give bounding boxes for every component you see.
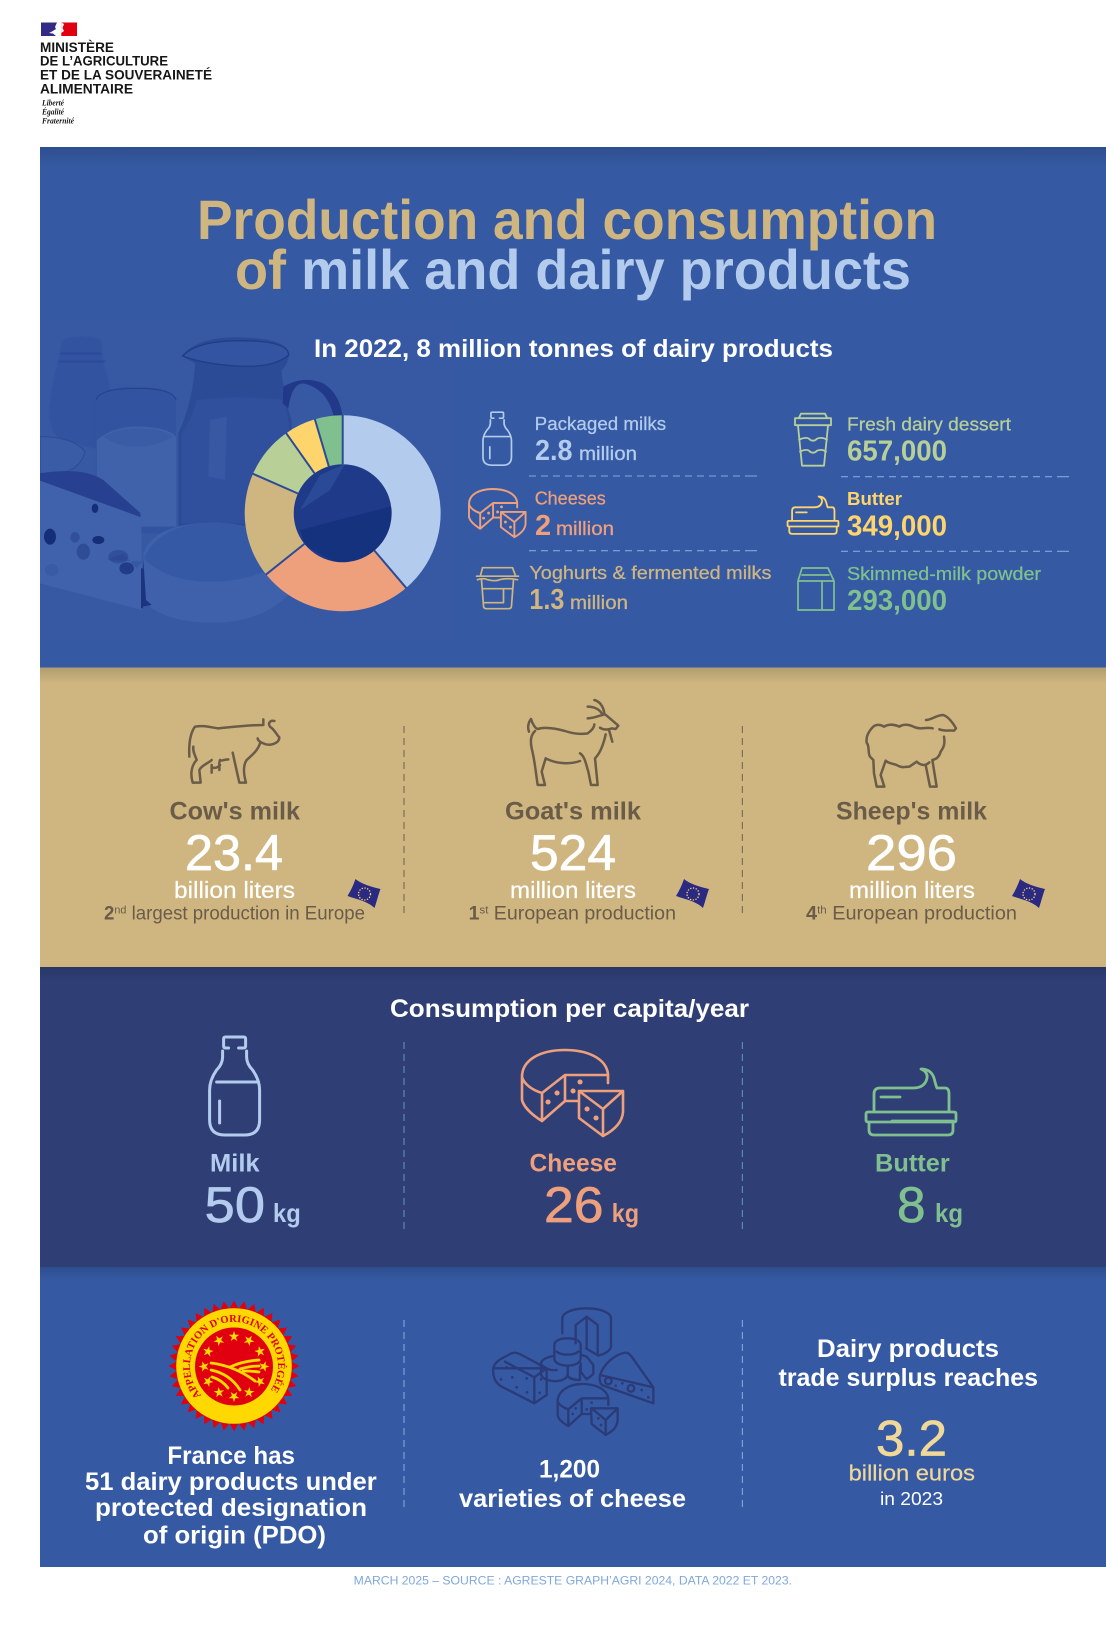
heading: tonnes of dairy products: In 2022, 8 million tonnes of dairy products: [314, 335, 833, 363]
column: cheese: Cheese: [530, 1150, 617, 1178]
item: cheeses: Cheeses: [535, 487, 606, 508]
text: PDO count: [85, 1442, 377, 1550]
column: trade surplus: trade surplus reaches: [778, 1364, 1038, 1392]
column: sheep's milk: 296: [866, 825, 957, 881]
ministry name: DE L’AGRICULTURE: [40, 54, 168, 69]
column: milk: Milk: [210, 1150, 260, 1178]
column: goat's milk: [469, 700, 709, 925]
icon: cheese: [469, 489, 526, 537]
column: goat's milk: 1: [469, 904, 480, 925]
icon: PDO seal: APPELLATION D'ORIGINE PROTÉGÉE: [183, 1315, 287, 1398]
item: yoghurts and fermented milks: million: [570, 593, 628, 614]
motto: [41, 99, 74, 125]
column: trade surplus: billion euros: [849, 1461, 975, 1486]
column: butter: [866, 1069, 963, 1233]
panel: facts: [40, 1267, 1106, 1567]
icon: French flag: [41, 22, 77, 36]
icon: cow: [189, 719, 279, 783]
ministry name: ET DE LA SOUVERAINETÉ: [40, 67, 212, 82]
heading: consumption per capita: Consumption per capita/year: [390, 995, 749, 1023]
column: milk: kg: [273, 1198, 301, 1228]
icon: EU flag: [676, 879, 709, 908]
column: cow's milk: 2: [104, 904, 114, 925]
icon: EU flag: [1012, 879, 1045, 908]
column: varieties of cheese: [459, 1308, 686, 1513]
item: yoghurts and fermented milks: Yoghurts & fermented milks: [529, 562, 771, 583]
icon: butter dish: [866, 1069, 956, 1135]
glass: [96, 387, 176, 533]
icon: milk carton: [798, 568, 834, 610]
item: butter: Butter: [847, 488, 902, 509]
icon: assorted cheeses: [493, 1308, 653, 1435]
item: fresh dairy dessert: Fresh dairy dessert: [847, 413, 1011, 434]
source: MARCH 2025 – SOURCE : AGRESTE GRAPH’AGRI 2024, DATA 2022 ET 2023.: [354, 1574, 792, 1588]
item: cheeses: million: [556, 519, 614, 540]
item: skimmed-milk powder: Skimmed-milk powder: [847, 563, 1041, 584]
logo: ministry: [40, 22, 212, 125]
text: varieties: [459, 1456, 686, 1513]
motto: Égalité: [41, 106, 64, 116]
column: goat's milk: Goat's milk: [505, 797, 641, 825]
item: cheeses: 2: [535, 510, 551, 542]
motto: Liberté: [41, 99, 64, 108]
camembert: [161, 523, 245, 534]
panel: production: [40, 147, 1106, 668]
panel: milk production: [40, 668, 1106, 967]
item: skimmed-milk powder: [798, 563, 1041, 617]
column: goat's milk: million liters: [510, 877, 636, 903]
title: of milk and dairy products: [235, 238, 911, 301]
item: fresh dairy dessert: 657,000: [847, 436, 947, 468]
column: milk: 50: [205, 1177, 265, 1233]
text: PDO count: 51 dairy products under: [85, 1468, 377, 1496]
icon: milk bottle: [210, 1037, 260, 1135]
column: trade surplus: [778, 1335, 1038, 1509]
ministry name: MINISTÈRE: [40, 40, 114, 55]
column: butter: 8: [897, 1177, 926, 1233]
column: butter: Butter: [875, 1150, 950, 1178]
segment: yoghurts: [245, 474, 304, 574]
motto: Fraternité: [41, 116, 74, 125]
icon: yoghurt pot: [476, 568, 518, 609]
item: packaged milks: [483, 412, 666, 467]
column: goat's milk: European production: [488, 904, 676, 925]
photo: dairy products: [40, 337, 342, 622]
item: yoghurts and fermented milks: [476, 562, 771, 616]
icon: EU flag: [348, 879, 380, 908]
item: fresh dairy dessert: [795, 413, 1011, 468]
chart: donut of dairy products: [245, 415, 441, 611]
column: cheese: [522, 1050, 639, 1233]
column: trade surplus: 3.2: [876, 1410, 947, 1466]
item: packaged milks: million: [579, 444, 637, 465]
column: sheep's milk: th: [817, 905, 827, 917]
icon: butter dish: [788, 497, 838, 534]
segment: cheeses: [266, 544, 406, 611]
column: cheese: kg: [612, 1198, 639, 1228]
cheese wedge: [40, 471, 141, 520]
icon: PDO seal: [168, 1300, 300, 1432]
column: butter: kg: [935, 1198, 963, 1228]
dish: [40, 437, 85, 473]
item: butter: 349,000: [847, 511, 947, 543]
segment: butter: [286, 419, 329, 473]
text: PDO count: France has: [167, 1442, 295, 1470]
column: cow's milk: Cow's milk: [170, 797, 300, 825]
segment: skimmed-milk powder: [315, 415, 343, 466]
icon: sheep: [867, 715, 956, 787]
column: goat's milk: st: [480, 905, 488, 917]
column: sheep's milk: European production: [827, 904, 1017, 925]
column: goat's milk: 524: [530, 825, 616, 881]
segment: fresh dessert: [253, 433, 314, 494]
title: [197, 188, 937, 301]
ministry name: ALIMENTAIRE: [40, 81, 133, 96]
column: cow's milk: billion liters: [174, 877, 295, 903]
column: PDO: [85, 1300, 377, 1550]
jug: [178, 337, 292, 527]
column: sheep's milk: million liters: [849, 877, 975, 903]
column: cow's milk: nd: [114, 905, 126, 917]
column: cow's milk: largest production in Europe: [126, 904, 365, 925]
column: sheep's milk: 4: [806, 904, 818, 925]
column: trade surplus: Dairy products: [817, 1335, 999, 1363]
column: milk: [205, 1037, 301, 1233]
column: cow's milk: 23.4: [185, 825, 283, 881]
ministry name: [40, 40, 212, 96]
text: PDO count: of origin (PDO): [143, 1522, 326, 1550]
item: yoghurts and fermented milks: 1.3: [529, 584, 564, 616]
column: trade surplus: in 2023: [880, 1489, 943, 1509]
item: butter: [788, 488, 947, 543]
column: cheese: 26: [544, 1177, 604, 1233]
column: cow's milk: [104, 719, 380, 925]
text: PDO count: protected designation: [95, 1494, 367, 1522]
item: packaged milks: Packaged milks: [535, 413, 666, 434]
item: packaged milks: 2.8: [535, 435, 572, 467]
item: cheeses: [469, 487, 614, 542]
segment: packaged milks: [343, 415, 441, 588]
text: varieties: 1,200: [539, 1456, 600, 1484]
panel: consumption: [40, 967, 1106, 1267]
icon: cheese: [522, 1050, 623, 1136]
text: varieties: varieties of cheese: [459, 1485, 686, 1513]
bottle: [49, 337, 115, 453]
icon: goat: [528, 700, 618, 785]
icon: dessert cup: [795, 414, 831, 466]
column: sheep's milk: Sheep's milk: [836, 797, 987, 825]
icon: milk bottle: [483, 412, 511, 465]
item: skimmed-milk powder: 293,000: [847, 585, 947, 617]
column: sheep's milk: [806, 715, 1045, 925]
title: Production and consumption: [197, 188, 937, 251]
